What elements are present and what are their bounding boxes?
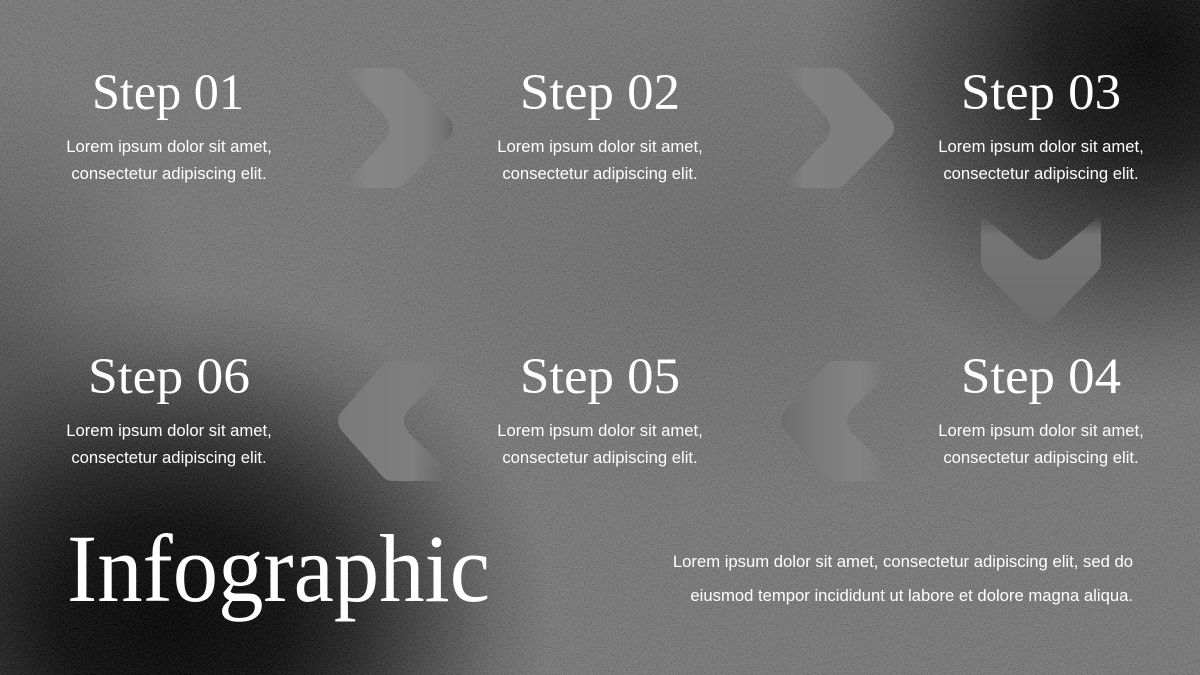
step 03 <box>938 65 1144 183</box>
title: Infographic <box>67 515 490 622</box>
step 02 <box>497 65 703 183</box>
arrow: step 01 to step 02 <box>341 68 453 188</box>
arrow: step 03 to step 04 <box>981 218 1101 323</box>
step 01 heading: Step 01 <box>92 65 244 121</box>
step 04 text: Lorem ipsum dolor sit amet, <box>938 421 1144 440</box>
step 04 heading: Step 04 <box>961 349 1121 405</box>
step 01 text: consectetur adipiscing elit. <box>71 164 267 183</box>
description text: eiusmod tempor incididunt ut labore et dolore magna aliqua. <box>690 586 1133 605</box>
step 01 text: Lorem ipsum dolor sit amet, <box>66 137 272 156</box>
step 05 <box>497 349 703 467</box>
arrow: step 02 to step 03 <box>782 68 894 188</box>
step 04 text: consectetur adipiscing elit. <box>943 448 1139 467</box>
step 06 text <box>66 421 272 467</box>
step 02 text <box>497 137 703 183</box>
step 05 text <box>497 421 703 467</box>
step 05 text: Lorem ipsum dolor sit amet, <box>497 421 703 440</box>
step 04 text <box>938 421 1144 467</box>
step 06 <box>66 349 272 467</box>
description text <box>673 552 1133 605</box>
step 06 text: Lorem ipsum dolor sit amet, <box>66 421 272 440</box>
step 03 text: Lorem ipsum dolor sit amet, <box>938 137 1144 156</box>
step 02 text: consectetur adipiscing elit. <box>502 164 698 183</box>
step 06 text: consectetur adipiscing elit. <box>71 448 267 467</box>
step 03 text <box>938 137 1144 183</box>
step 01 text <box>66 137 272 183</box>
step 02 text: Lorem ipsum dolor sit amet, <box>497 137 703 156</box>
step 06 heading: Step 06 <box>88 349 250 405</box>
arrow: step 05 to step 06 <box>338 361 459 481</box>
step 03 heading: Step 03 <box>961 65 1121 121</box>
step 01 <box>66 65 272 183</box>
step 03 text: consectetur adipiscing elit. <box>943 164 1139 183</box>
step 05 heading: Step 05 <box>520 349 680 405</box>
arrow: step 04 to step 05 <box>781 361 902 481</box>
step 05 text: consectetur adipiscing elit. <box>502 448 698 467</box>
description text: Lorem ipsum dolor sit amet, consectetur adipiscing elit, sed do <box>673 552 1133 571</box>
step 04 <box>938 349 1144 467</box>
step 02 heading: Step 02 <box>520 65 680 121</box>
